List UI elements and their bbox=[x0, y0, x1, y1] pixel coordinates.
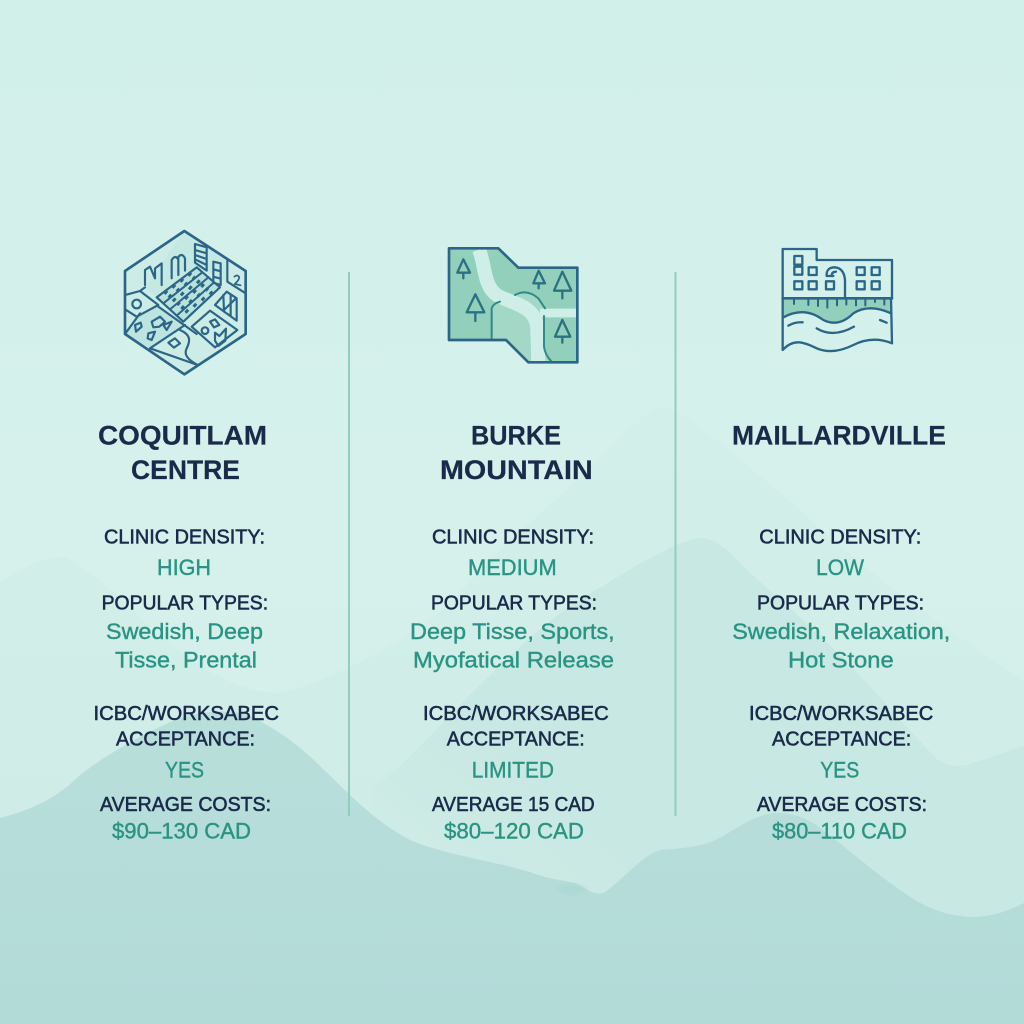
heading: CENTRE bbox=[131, 455, 240, 485]
average costs label: AVERAGE COSTS: bbox=[757, 794, 927, 816]
heading: MAILLARDVILLE bbox=[732, 420, 946, 450]
popular types value: Deep Tisse, Sports, bbox=[410, 619, 615, 644]
clinic density value: HIGH bbox=[157, 555, 211, 580]
average costs value: $90–130 CAD bbox=[112, 818, 251, 843]
popular types value: Myofatical Release bbox=[413, 648, 614, 673]
popular types value bbox=[410, 619, 615, 673]
average costs value: $80–120 CAD bbox=[444, 818, 584, 843]
popular types value: Tisse, Prental bbox=[115, 648, 257, 673]
clinic density label: CLINIC DENSITY: bbox=[104, 527, 265, 549]
popular types value bbox=[732, 619, 950, 673]
average costs label: AVERAGE 15 CAD bbox=[432, 794, 595, 816]
clinic density label: CLINIC DENSITY: bbox=[759, 527, 921, 549]
insurance acceptance label: ACCEPTANCE: bbox=[447, 728, 585, 750]
insurance acceptance label bbox=[423, 703, 609, 750]
divider: left bbox=[348, 272, 350, 816]
icon: isometric city map bbox=[125, 231, 246, 374]
background mountains bbox=[0, 408, 1024, 1024]
divider: right bbox=[674, 272, 676, 816]
panel: Coquitlam Centre bbox=[94, 420, 279, 843]
popular types label: POPULAR TYPES: bbox=[102, 593, 268, 615]
average costs value: $80–110 CAD bbox=[772, 818, 907, 843]
insurance acceptance label: ACCEPTANCE: bbox=[116, 728, 255, 750]
insurance acceptance value: YES bbox=[165, 757, 204, 782]
heading bbox=[98, 420, 267, 485]
clinic density value: MEDIUM bbox=[468, 555, 557, 580]
panel: Maillardville bbox=[732, 420, 950, 843]
insurance acceptance value: YES bbox=[820, 757, 859, 782]
clinic density value: LOW bbox=[816, 555, 864, 580]
icon: riverside buildings bbox=[783, 249, 892, 351]
heading bbox=[440, 420, 593, 485]
insurance acceptance label: ICBC/WORKSABEC bbox=[749, 703, 933, 725]
insurance acceptance label bbox=[749, 703, 933, 750]
insurance acceptance label: ICBC/WORKSABEC bbox=[94, 703, 279, 725]
insurance acceptance label bbox=[94, 703, 279, 750]
heading: MOUNTAIN bbox=[440, 455, 593, 485]
heading: BURKE bbox=[471, 420, 561, 450]
popular types value: Hot Stone bbox=[788, 648, 894, 673]
average costs label: AVERAGE COSTS: bbox=[100, 794, 271, 816]
popular types label: POPULAR TYPES: bbox=[431, 593, 597, 615]
insurance acceptance label: ACCEPTANCE: bbox=[772, 728, 911, 750]
icon: park map with trees bbox=[449, 248, 577, 362]
insurance acceptance value: LIMITED bbox=[472, 757, 554, 782]
popular types label: POPULAR TYPES: bbox=[757, 593, 924, 615]
popular types value bbox=[106, 619, 263, 673]
popular types value: Swedish, Relaxation, bbox=[732, 619, 950, 644]
heading: COQUITLAM bbox=[98, 420, 267, 450]
insurance acceptance label: ICBC/WORKSABEC bbox=[423, 703, 609, 725]
popular types value: Swedish, Deep bbox=[106, 619, 263, 644]
clinic density label: CLINIC DENSITY: bbox=[432, 527, 594, 549]
panel: Burke Mountain bbox=[410, 420, 615, 843]
